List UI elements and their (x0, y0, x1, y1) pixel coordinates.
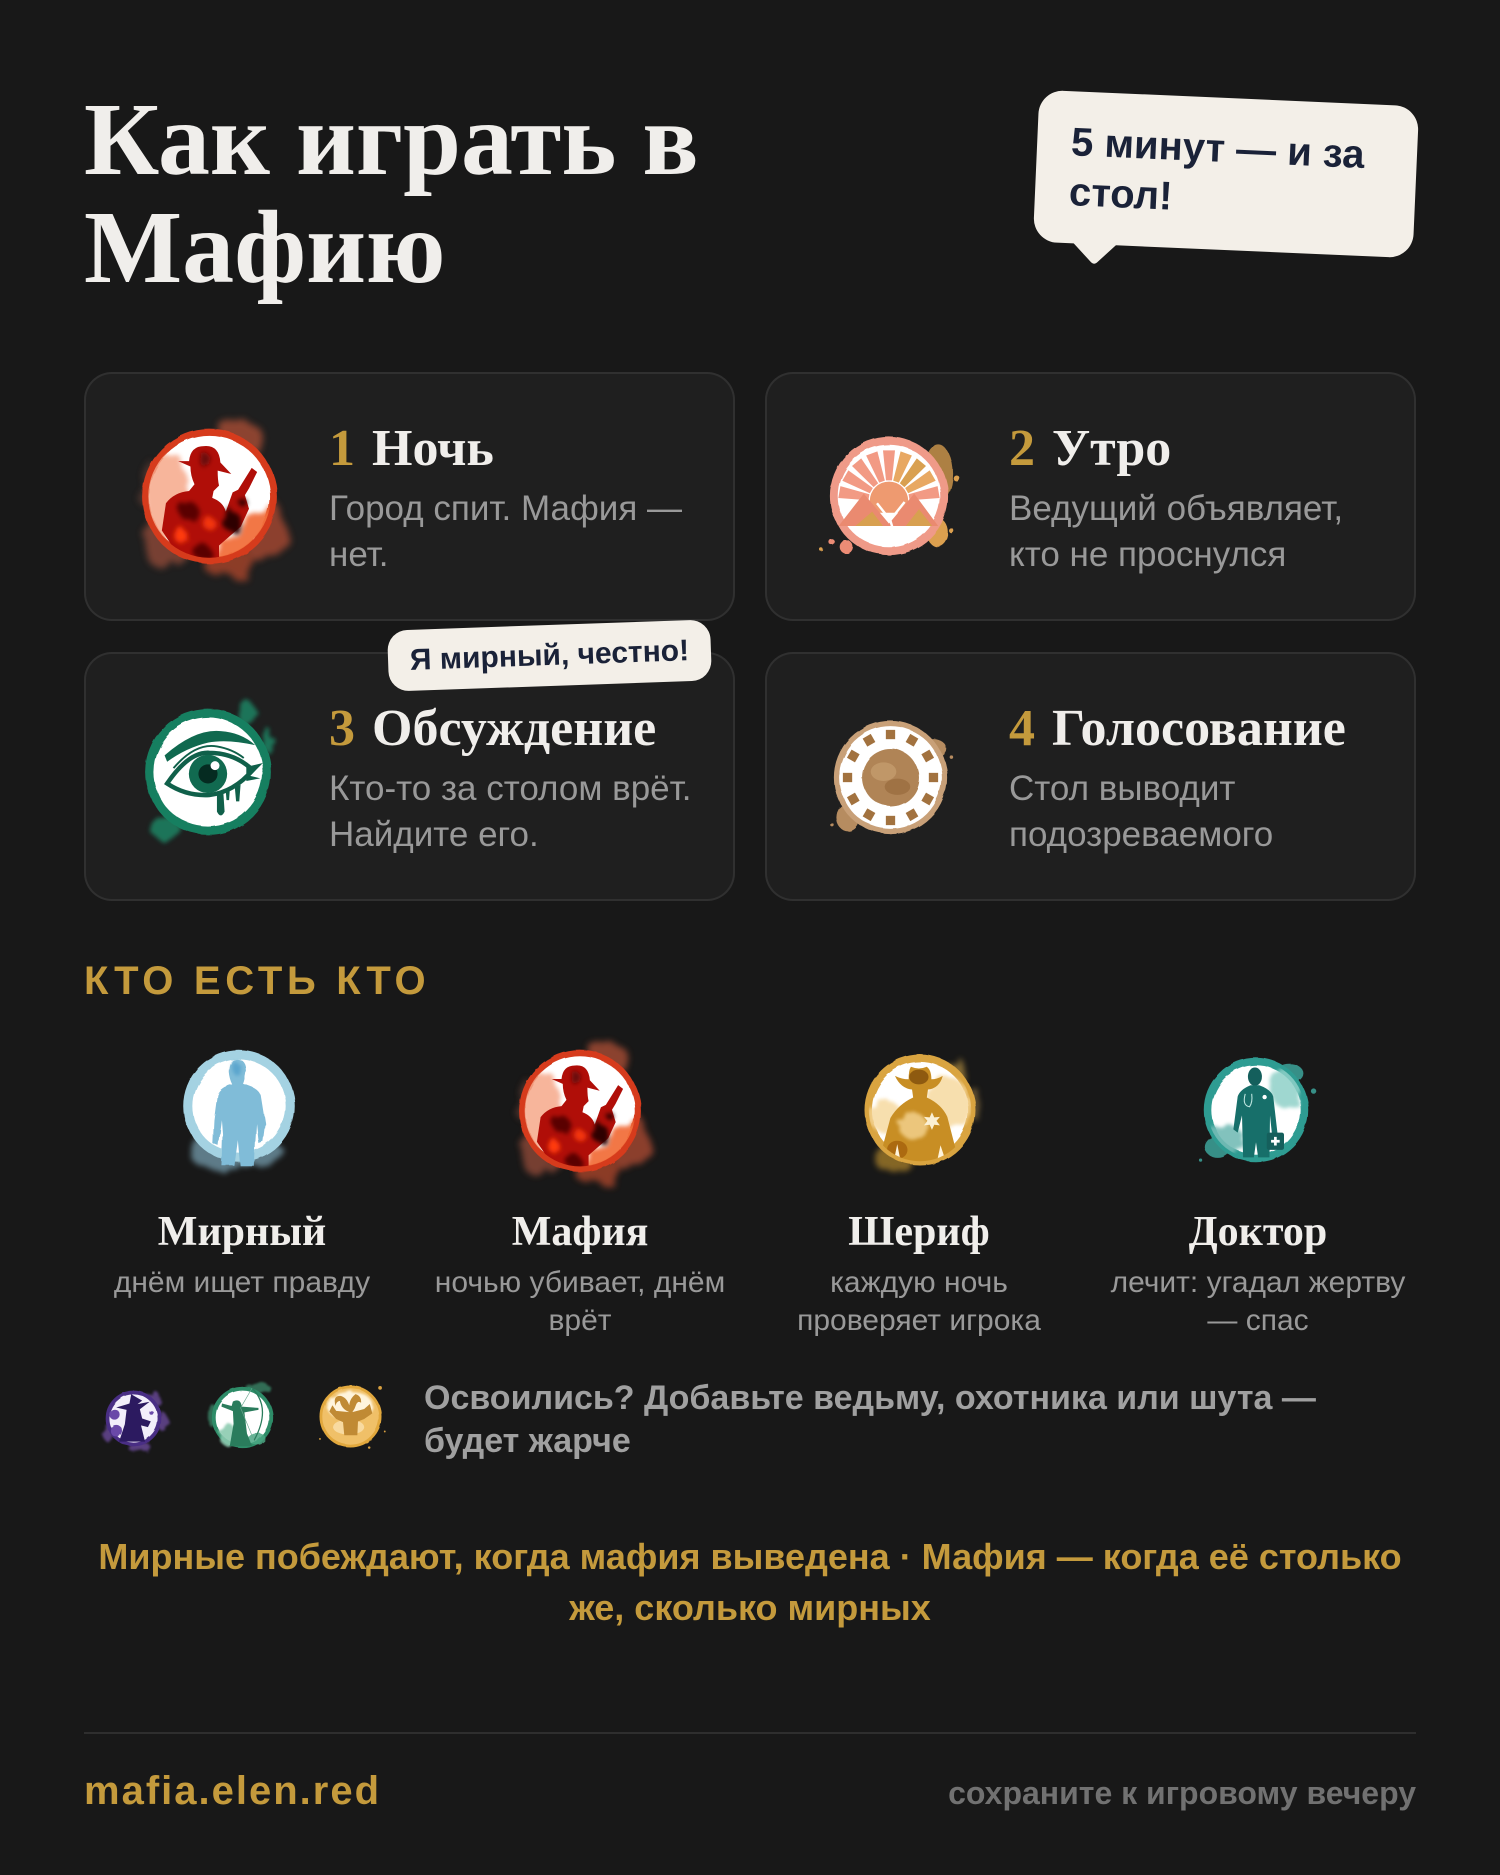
footer: save note: сохраните к игровому вечеру (948, 1775, 1416, 1811)
speech bubble: I am a civilian (387, 619, 712, 692)
panel: step 2 morning (765, 372, 1416, 621)
role: sheriff (797, 1209, 1041, 1337)
step 1 text: Город спит. Мафия — (329, 489, 682, 528)
title (84, 82, 699, 305)
civilian name: Мирный (158, 1209, 326, 1255)
icon: mafia (514, 1037, 658, 1192)
step 1 text (329, 489, 682, 574)
title: Мафию (84, 190, 446, 305)
civilian description: днём ищет правду (114, 1266, 370, 1299)
speech bubble: I am a civilian: Я мирный, честно! (409, 634, 690, 677)
step 2 text: Ведущий объявляет, (1009, 489, 1343, 528)
panel: step 4 vote (765, 652, 1416, 901)
role: doctor (1110, 1209, 1406, 1337)
step 3 text: Найдите его. (329, 815, 539, 854)
doctor description: лечит: угадал жертву (1111, 1266, 1405, 1299)
mafia description (435, 1266, 725, 1337)
speech bubble: 5 minutes (1033, 90, 1419, 258)
step 4 text (1009, 769, 1273, 854)
icon: civilian (183, 1050, 296, 1176)
step 2 text (1009, 489, 1343, 574)
icon: mafia gunman (136, 415, 294, 586)
role: civilian (114, 1209, 370, 1299)
icon: doctor (1198, 1057, 1316, 1162)
win condition callout: Мирные побеждают, когда мафия выведена · Мафия — когда её столько (98, 1536, 1402, 1577)
footer: site name: mafia.elen.red (84, 1769, 381, 1813)
doctor name: Доктор (1189, 1209, 1327, 1255)
panel: step 1 night (84, 372, 735, 621)
win condition callout: же, сколько мирных (569, 1587, 931, 1628)
sheriff description: проверяет игрока (797, 1304, 1041, 1337)
win condition callout (98, 1536, 1402, 1628)
icon: round table (830, 720, 954, 835)
speech bubble: 5 minutes: 5 минут — и за (1070, 120, 1365, 177)
step 2 heading: 2 Утро (1009, 420, 1171, 476)
step 1 heading: 1 Ночь (329, 420, 494, 476)
title: Как играть в (84, 82, 699, 197)
step 2 text: кто не проснулся (1009, 535, 1286, 574)
icon: witch (100, 1390, 172, 1454)
text: extra roles note: Освоились? Добавьте ведьму, охотника или шута — (424, 1379, 1316, 1417)
sheriff name: Шериф (848, 1209, 990, 1255)
icon: sunrise (819, 436, 960, 556)
step 3 heading: 3 Обсуждение (329, 700, 656, 756)
speech bubble: 5 minutes: стол! (1068, 170, 1173, 219)
icon: green eye (145, 697, 278, 845)
text: extra roles note: будет жарче (424, 1422, 631, 1460)
text: extra roles note (424, 1379, 1316, 1460)
step 3 text: Кто-то за столом врёт. (329, 769, 692, 808)
doctor description (1110, 1266, 1406, 1337)
icon: archer (206, 1380, 274, 1448)
section heading: who is who: КТО ЕСТЬ КТО (84, 959, 430, 1003)
panel: step 3 discussion (84, 652, 735, 901)
icon: jester (319, 1385, 386, 1449)
doctor description: — спас (1207, 1304, 1309, 1337)
mafia description: врёт (548, 1304, 612, 1337)
role: mafia (435, 1209, 725, 1337)
step 4 text: Стол выводит (1009, 769, 1235, 808)
step 4 heading: 4 Голосование (1009, 700, 1346, 756)
step 1 text: нет. (329, 535, 389, 574)
mafia description: ночью убивает, днём (435, 1266, 725, 1299)
sheriff description: каждую ночь (830, 1266, 1008, 1299)
mafia name: Мафия (512, 1209, 648, 1255)
sheriff description (797, 1266, 1041, 1337)
icon: sheriff (864, 1054, 983, 1176)
step 3 text (329, 769, 692, 854)
step 4 text: подозреваемого (1009, 815, 1273, 854)
